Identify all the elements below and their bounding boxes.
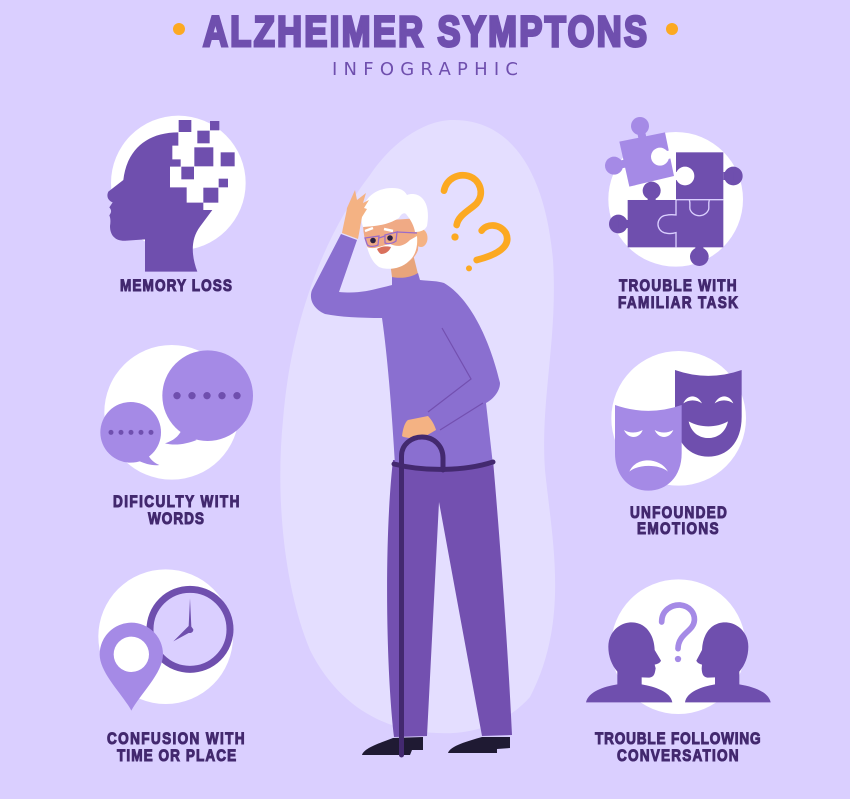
background blob behind figure (280, 120, 555, 733)
label: UNFOUNDED (630, 504, 727, 522)
title: ALZHEIMER SYMPTONS (203, 8, 647, 56)
label: MEMORY LOSS (120, 277, 232, 295)
trousers (387, 460, 512, 737)
mouth (377, 246, 391, 254)
sweater fold lines (428, 328, 483, 430)
panel: trouble with familiar task (605, 117, 743, 312)
eyes (370, 235, 393, 243)
question marks (444, 175, 507, 271)
label: TROUBLE WITH (619, 277, 737, 295)
shoes (362, 737, 510, 755)
hand on head (342, 190, 369, 239)
hair (361, 188, 428, 232)
header: title block (173, 8, 678, 80)
bullet: right (666, 23, 678, 35)
panel: difficulty with words (100, 345, 253, 528)
label: TROUBLE FOLLOWING (595, 730, 761, 748)
panel: unfounded emotions (611, 351, 746, 538)
beard (367, 236, 417, 269)
hand on cane (402, 416, 436, 440)
sweater with raised arm (311, 234, 500, 470)
label: DIFICULTY WITH (113, 493, 239, 511)
icon: theatre masks (611, 351, 746, 491)
label line 2: CONVERSATION (617, 747, 739, 765)
eyebrows (365, 228, 393, 231)
icon: head with fading squares (107, 116, 246, 272)
cane (394, 437, 493, 755)
label line 2: EMOTIONS (637, 520, 719, 538)
icon: puzzle pieces (605, 117, 743, 267)
icon: two heads with question mark (586, 579, 771, 714)
bullet: left (173, 23, 185, 35)
neck (390, 250, 418, 279)
panel: confusion with time or place (98, 569, 245, 765)
face (363, 218, 420, 268)
illustration: elderly man with cane (311, 175, 512, 755)
icon: speech bubbles (100, 345, 253, 480)
subtitle: INFOGRAPHIC (332, 59, 518, 80)
glasses (365, 232, 417, 246)
label line 2: WORDS (148, 510, 204, 528)
panel: memory loss (107, 116, 246, 295)
panel: trouble following conversation (586, 579, 771, 765)
ear (414, 229, 428, 247)
label line 2: TIME OR PLACE (117, 747, 236, 765)
icon: clock and map pin (98, 569, 233, 711)
label line 2: FAMILIAR TASK (618, 294, 738, 312)
label: CONFUSION WITH (107, 730, 245, 748)
